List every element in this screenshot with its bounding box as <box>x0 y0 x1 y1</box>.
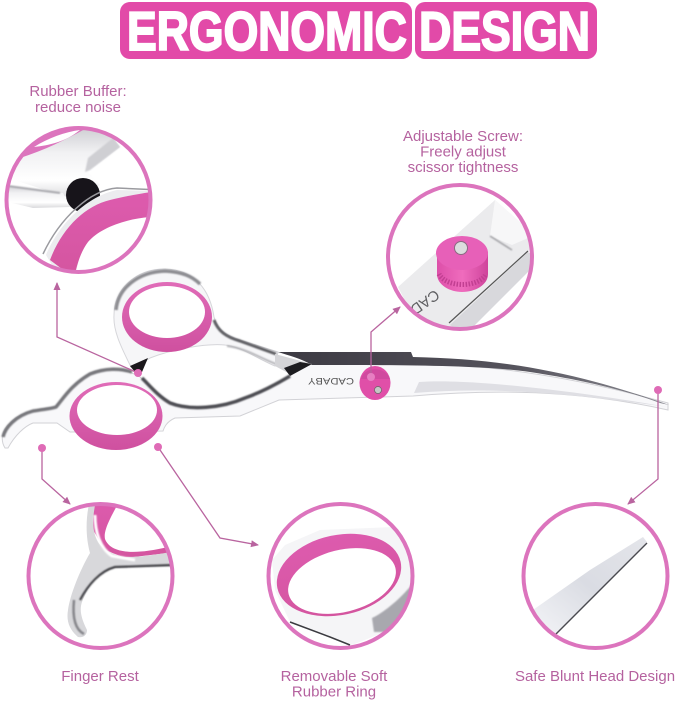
pink screw <box>360 366 390 400</box>
inset: removable soft rubber ring <box>268 504 420 648</box>
label: adjustable screw: Adjustable Screw: <box>403 128 523 145</box>
lower ring <box>70 382 162 450</box>
pointer: finger rest <box>38 444 70 504</box>
inset: rubber buffer <box>0 128 160 278</box>
label: removable soft rubber ring: Removable Soft <box>281 668 387 685</box>
pointer: adjustable screw <box>367 307 400 381</box>
label: removable soft rubber ring: Rubber Ring <box>292 684 376 700</box>
rubber buffer <box>130 358 148 372</box>
inset: safe blunt head <box>524 504 668 648</box>
inset: adjustable screw: CAD <box>407 286 442 318</box>
pointer: rubber buffer <box>57 283 142 377</box>
label: finger rest: Finger Rest <box>61 668 140 685</box>
brand engraving: CADABY <box>307 375 354 386</box>
inset: adjustable screw <box>388 185 540 335</box>
upper ring <box>122 282 212 352</box>
label: rubber buffer: reduce noise <box>35 99 121 116</box>
upper handle <box>114 269 278 370</box>
label: adjustable screw: scissor tightness <box>408 159 518 176</box>
pointer: rubber ring <box>154 443 258 545</box>
label: rubber buffer: Rubber Buffer: <box>29 83 127 100</box>
blade bevel <box>414 381 668 407</box>
label: adjustable screw: Freely adjust <box>420 144 507 160</box>
pointer: blunt head <box>628 386 662 504</box>
inset: finger rest <box>28 500 175 648</box>
lower blade and body <box>2 363 668 448</box>
arm shading <box>142 376 290 408</box>
scissors illustration <box>2 269 669 450</box>
label: safe blunt head design: Safe Blunt Head Design <box>515 668 675 685</box>
dark upper blade <box>278 352 669 405</box>
